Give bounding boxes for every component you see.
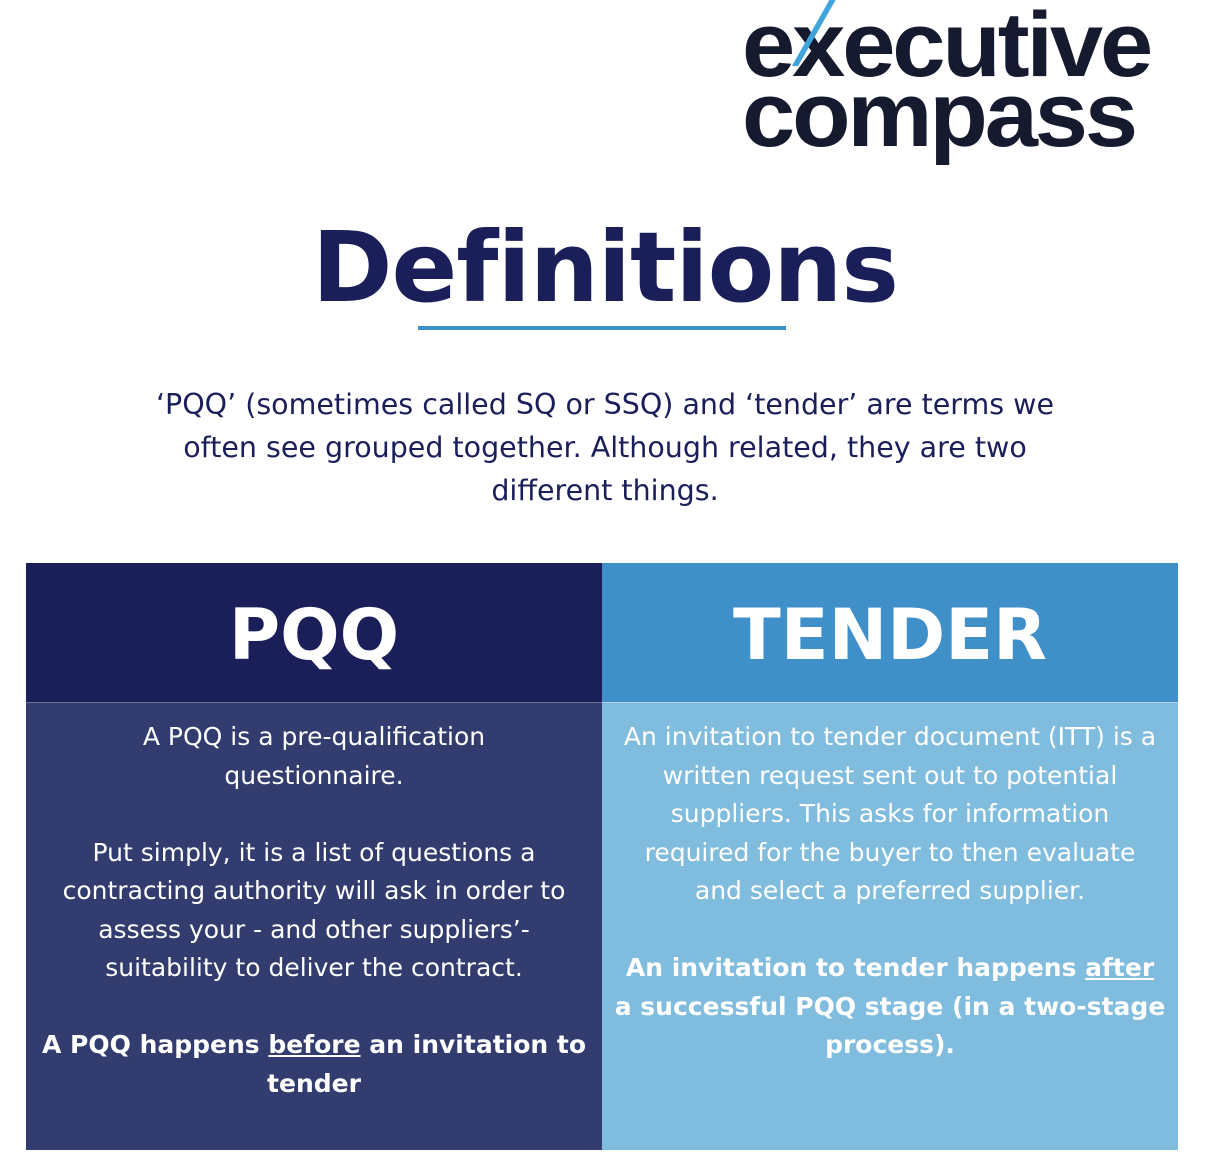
PQQ body: A PQQ is a pre-qualification bbox=[143, 722, 485, 751]
intro text: often see grouped together. Although related, they are two bbox=[183, 431, 1027, 464]
PQQ body: questionnaire. bbox=[224, 760, 404, 790]
title underline bbox=[418, 326, 786, 330]
TENDER header: TENDER bbox=[733, 594, 1047, 676]
panel: PQQ bbox=[26, 563, 602, 1150]
TENDER body: required for the buyer to then evaluate bbox=[645, 838, 1135, 866]
PQQ body: contracting authority will ask in order to bbox=[63, 876, 565, 905]
PQQ header: PQQ bbox=[229, 594, 399, 676]
logo bbox=[742, 0, 1150, 166]
PQQ body: tender bbox=[267, 1068, 361, 1098]
TENDER body: An invitation to tender happens after bbox=[626, 953, 1154, 982]
title: Definitions bbox=[312, 211, 898, 324]
TENDER header bbox=[602, 563, 1178, 702]
PQQ body: Put simply, it is a list of questions a bbox=[93, 838, 535, 866]
TENDER body: An invitation to tender document (ITT) is a bbox=[624, 722, 1156, 751]
PQQ body: suitability to deliver the contract. bbox=[105, 953, 523, 982]
TENDER body: written request sent out to potential bbox=[663, 760, 1117, 790]
logo: compass bbox=[742, 64, 1135, 166]
TENDER body: suppliers. This asks for information bbox=[671, 799, 1109, 828]
intro text bbox=[156, 388, 1054, 507]
TENDER body: a successful PQQ stage (in a two-stage bbox=[615, 992, 1165, 1020]
PQQ body: A PQQ happens before an invitation to bbox=[42, 1030, 586, 1059]
TENDER body bbox=[602, 702, 1178, 1150]
TENDER body: and select a preferred supplier. bbox=[695, 876, 1085, 905]
intro text: ‘PQQ’ (sometimes called SQ or SSQ) and ‘tender’ are terms we bbox=[156, 388, 1054, 421]
PQQ header bbox=[26, 563, 602, 702]
PQQ body: assess your - and other suppliers’- bbox=[98, 914, 530, 944]
panel: TENDER bbox=[602, 563, 1178, 1150]
TENDER body: process). bbox=[825, 1030, 955, 1059]
intro text: different things. bbox=[491, 474, 719, 507]
PQQ body bbox=[26, 702, 602, 1150]
